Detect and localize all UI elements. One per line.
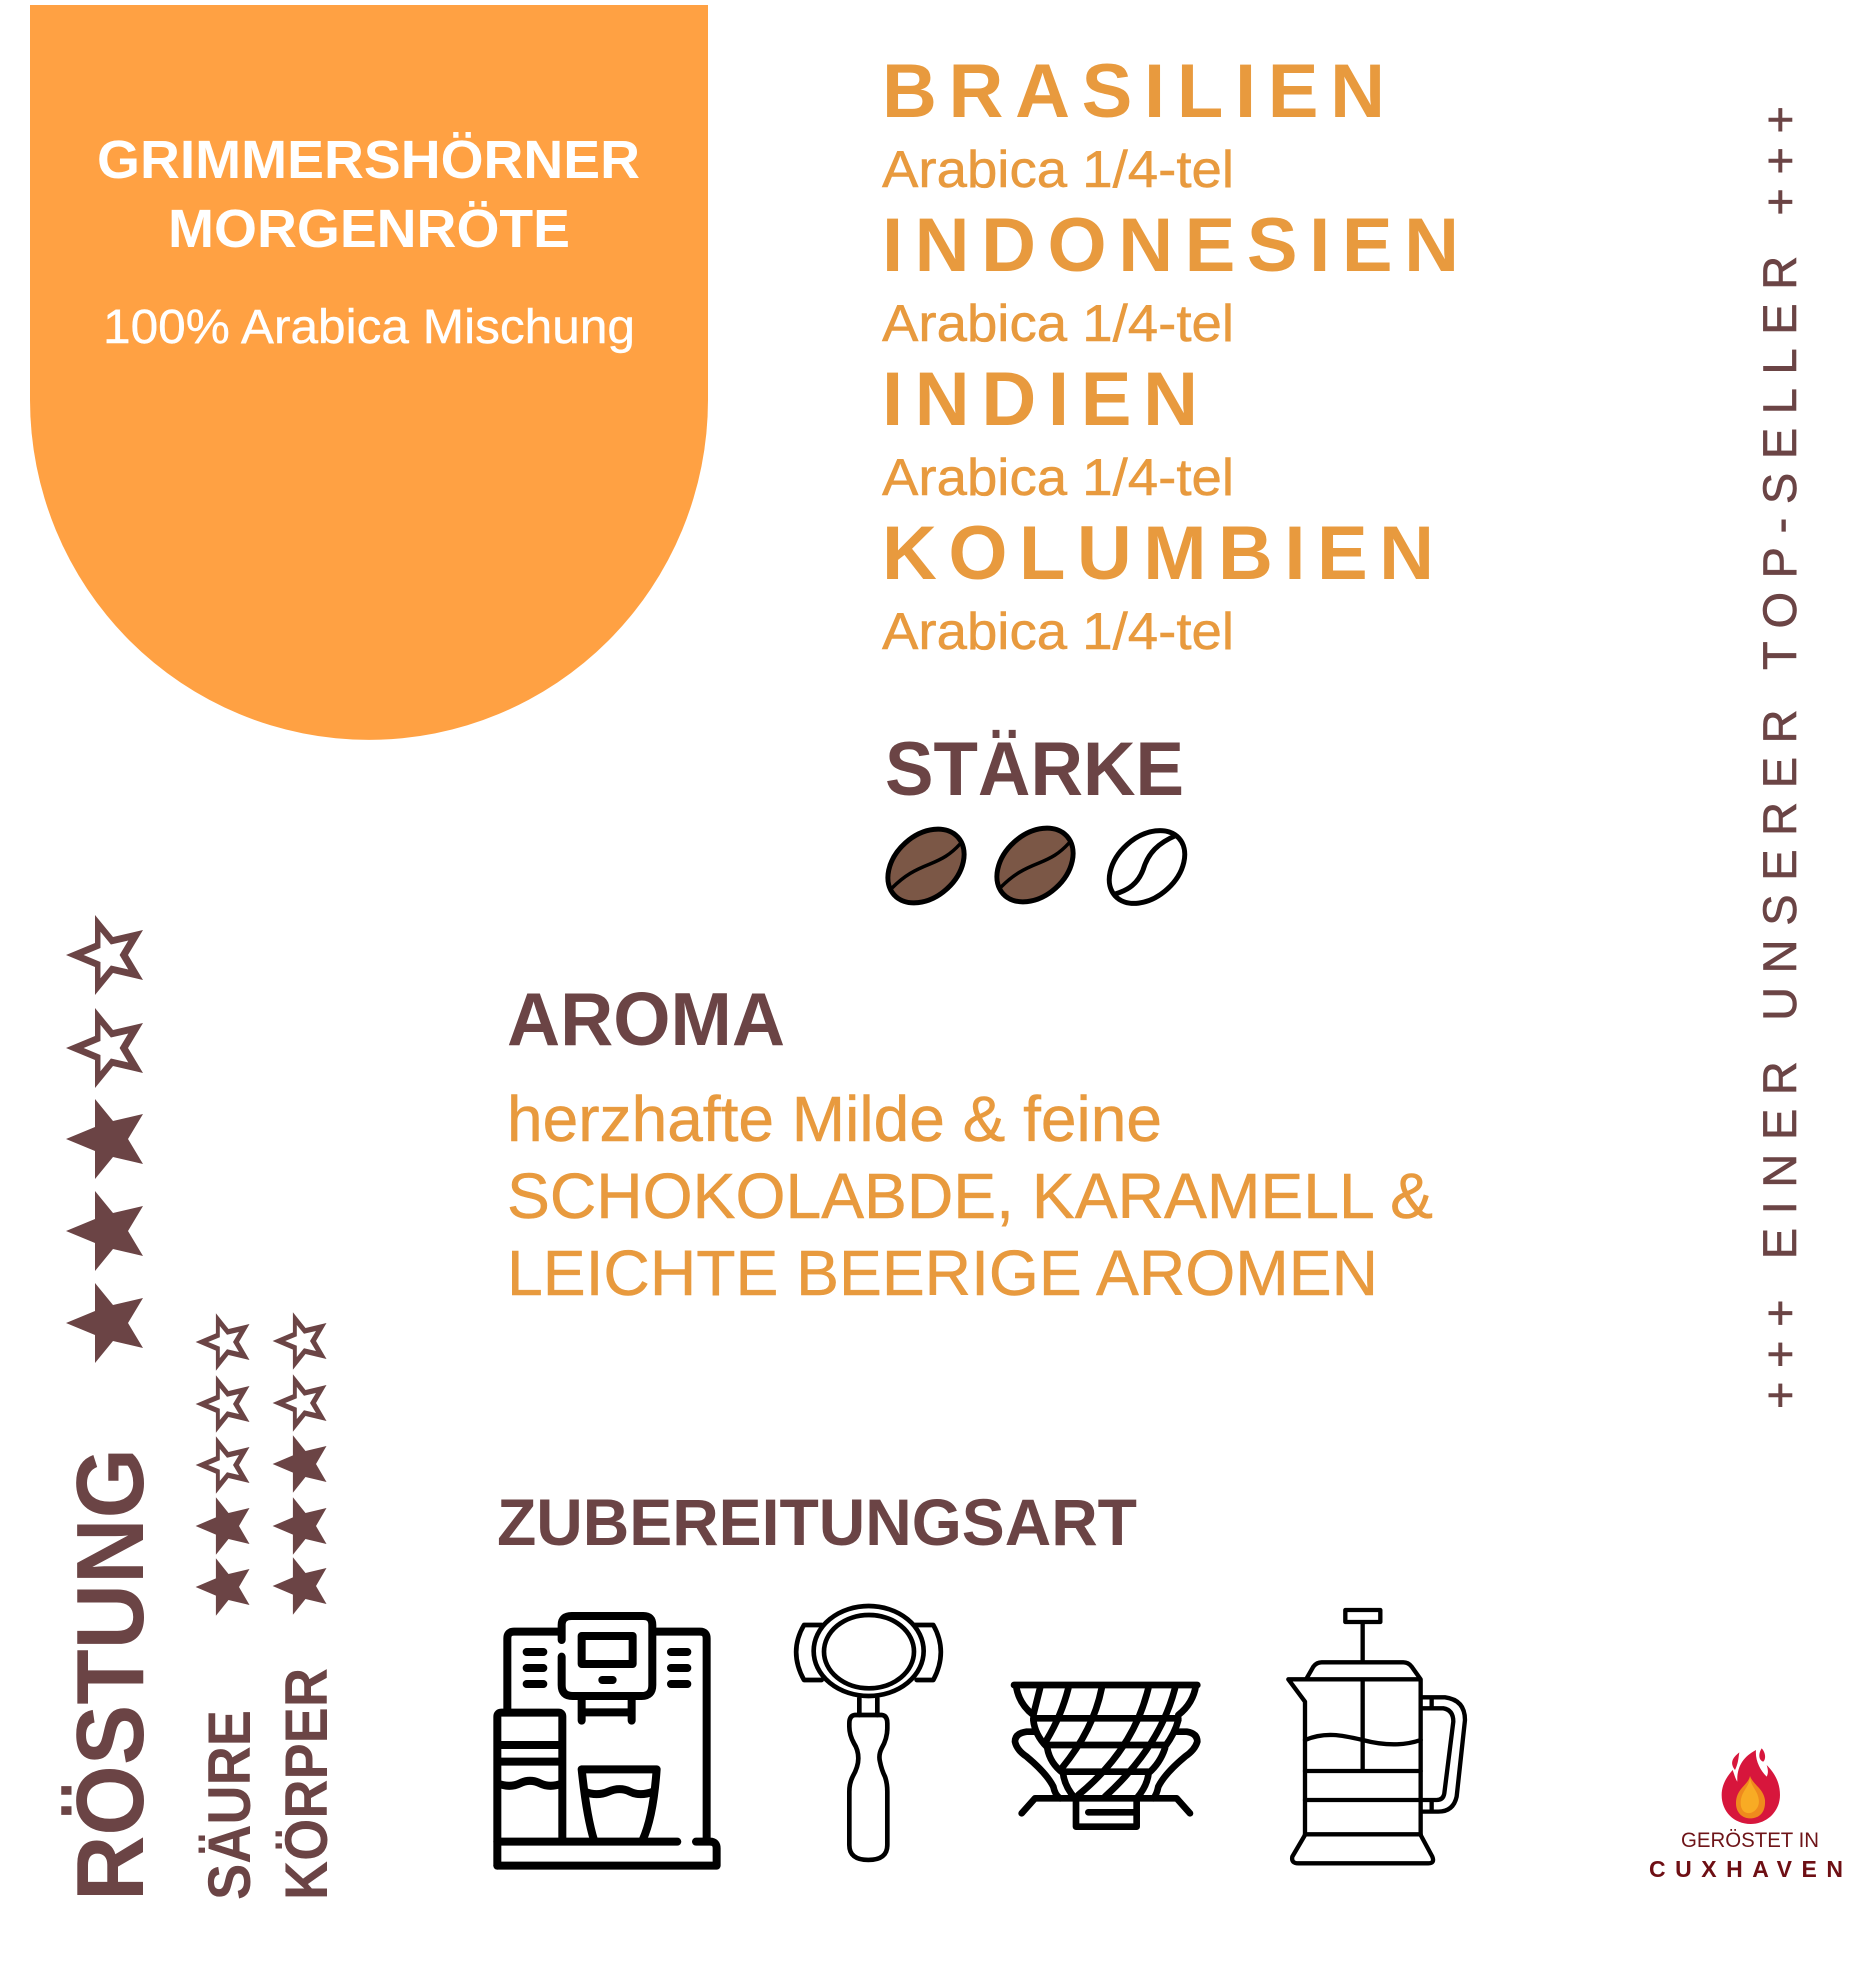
heading: Aroma: AROMA <box>507 977 785 1061</box>
origin: Kolumbien: Arabica 1/4-tel <box>882 603 1234 661</box>
origin: Indien: Arabica 1/4-tel <box>882 449 1234 507</box>
icon: flame <box>1722 1748 1780 1824</box>
icon: coffee machine <box>497 1616 717 1866</box>
aroma description: LEICHTE BEERIGE AROMEN <box>507 1237 1378 1309</box>
text: Cuxhaven: CUXHAVEN <box>1649 1856 1843 1882</box>
heading: Stärke: STÄRKE <box>885 727 1184 812</box>
origin: Indonesien <box>882 203 1459 353</box>
panel: product title shield <box>30 5 708 740</box>
label: Körper: KÖRPER <box>273 1668 340 1900</box>
origin: Indien: INDIEN <box>882 357 1198 442</box>
heading: product name line 1: GRIMMERSHÖRNER <box>97 130 640 190</box>
heading: Zubereitungsart: ZUBEREITUNGSART <box>497 1485 1137 1559</box>
origin: Indonesien: Arabica 1/4-tel <box>882 295 1234 353</box>
origin: Indien <box>882 357 1234 507</box>
subtitle: 100% Arabica Mischung <box>103 301 635 354</box>
origin: Brasilien <box>882 49 1385 199</box>
icon: filled bean <box>982 813 1088 917</box>
origin: Indonesien: INDONESIEN <box>882 203 1459 288</box>
aroma description: SCHOKOLABDE, KARAMELL & <box>507 1160 1433 1232</box>
heading: product name line 2: MORGENRÖTE <box>168 199 570 259</box>
icon: pour-over dripper <box>1014 1685 1197 1827</box>
rating: Körper stars <box>273 1312 326 1615</box>
label: Röstung: RÖSTUNG <box>57 1448 164 1901</box>
text: Geröstet in: GERÖSTET IN <box>1681 1829 1819 1852</box>
icon: filled bean <box>873 814 979 918</box>
logo: roasted in Cuxhaven <box>1649 1748 1843 1882</box>
label: Säure: SÄURE <box>196 1710 263 1900</box>
origin: Brasilien: BRASILIEN <box>882 49 1385 134</box>
rating: Säure stars <box>196 1313 250 1616</box>
origin: Kolumbien: KOLUMBIEN <box>882 511 1434 596</box>
rating: Röstung stars <box>66 915 143 1363</box>
origin list <box>882 49 1459 661</box>
icon: portafilter <box>796 1606 941 1860</box>
aroma description <box>507 1083 1433 1309</box>
aroma description: herzhafte Milde & feine <box>507 1083 1162 1155</box>
icon: French press <box>1288 1610 1465 1863</box>
icon: empty bean <box>1095 816 1199 918</box>
origin: Kolumbien <box>882 511 1434 661</box>
origin: Brasilien: Arabica 1/4-tel <box>882 141 1234 199</box>
vertical slogan: +++ EINER UNSERER TOP-SELLER +++ <box>1753 106 1806 1409</box>
strength rating beans <box>873 813 1199 918</box>
